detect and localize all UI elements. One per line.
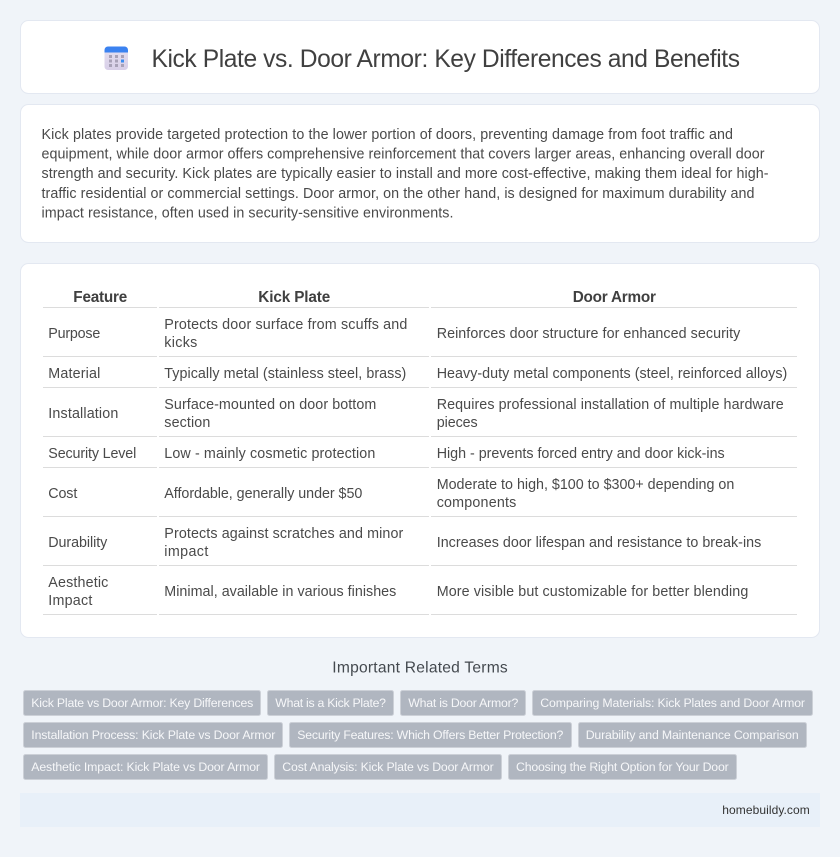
tag: installation process: Installation Process: Kick Plate vs Door Armor [31, 728, 275, 742]
panel: header [20, 20, 820, 94]
intro paragraph [42, 127, 769, 221]
tag: cost analysis: Cost Analysis: Kick Plate vs Door Armor [282, 760, 494, 774]
tag: choosing the right option [508, 754, 736, 780]
table header row [43, 289, 797, 308]
row: material: Material [48, 366, 100, 382]
tag: what is door armor: What is Door Armor? [408, 696, 518, 710]
panel: comparison table [20, 264, 820, 638]
row: security level: High - prevents forced entry and door kick-ins [437, 446, 725, 462]
row: installation: Surface-mounted on door bottom [164, 397, 376, 413]
footer source: homebuildy.com [722, 803, 810, 817]
row: aesthetic impact [43, 575, 797, 615]
row: purpose: Protects door surface from scuffs and [164, 317, 407, 333]
tag: security features [290, 722, 572, 748]
row: aesthetic impact: Minimal, available in various finishes [164, 584, 396, 600]
intro paragraph: strength and security. Kick plates are typically easier to install and more cost-effective, making them ideal for high- [42, 166, 769, 182]
table header row: Kick Plate [258, 289, 330, 306]
row: cost: Cost [48, 486, 77, 502]
tag: durability and maintenance [578, 722, 806, 748]
row: installation: section [164, 415, 210, 431]
row: installation: Requires professional installation of multiple hardware [437, 397, 784, 413]
tag: what is door armor [400, 690, 526, 716]
tag: aesthetic impact [24, 754, 268, 780]
intro paragraph: equipment, while door armor offers comprehensive reinforcement that covers larger areas, enhancing overall door [42, 147, 765, 163]
row: durability [43, 526, 797, 566]
intro paragraph: impact resistance, often used in security-sensitive environments. [42, 205, 454, 221]
tag: choosing the right option: Choosing the Right Option for Your Door [516, 760, 729, 774]
icon: calendar [104, 46, 128, 70]
row: installation [43, 397, 797, 437]
row: material [43, 366, 797, 388]
tag: aesthetic impact: Aesthetic Impact: Kick Plate vs Door Armor [31, 760, 260, 774]
row: cost [43, 477, 797, 517]
row: durability: Protects against scratches and minor [164, 526, 404, 542]
intro paragraph: Kick plates provide targeted protection to the lower portion of doors, preventing damage from foot traffic and [42, 127, 733, 143]
row: aesthetic impact: Aesthetic [48, 575, 108, 591]
row: material: Typically metal (stainless steel, brass) [164, 366, 406, 382]
row: purpose [43, 317, 797, 357]
row: purpose: Reinforces door structure for enhanced security [437, 326, 741, 342]
row: material: Heavy-duty metal components (steel, reinforced alloys) [437, 366, 787, 382]
row: security level: Security Level [48, 446, 136, 462]
tag: security features: Security Features: Which Offers Better Protection? [297, 728, 563, 742]
row: durability: Increases door lifespan and resistance to break-ins [437, 535, 761, 551]
tag: comparing materials: Comparing Materials: Kick Plates and Door Armor [540, 696, 805, 710]
title: Kick Plate vs. Door Armor: Key Differences and Benefits [152, 46, 740, 73]
panel: introduction [20, 104, 820, 242]
row: purpose: Purpose [48, 326, 100, 342]
row: aesthetic impact: More visible but customizable for better blending [437, 584, 748, 600]
tag: comparing materials [532, 690, 812, 716]
heading: related terms: Important Related Terms [332, 660, 508, 676]
intro paragraph: traffic residential or commercial settings. Door armor, on the other hand, is designed for maximum durability and [42, 186, 755, 202]
tag: what is a kick plate: What is a Kick Plate? [275, 696, 386, 710]
row: purpose: kicks [164, 335, 197, 351]
row: cost: Affordable, generally under $50 [164, 486, 362, 502]
row: cost: components [437, 495, 516, 511]
tag: cost analysis [274, 754, 502, 780]
tag: durability and maintenance: Durability and Maintenance Comparison [586, 728, 799, 742]
row: durability: impact [164, 544, 208, 560]
row: aesthetic impact: Impact [48, 593, 92, 609]
tag: installation process [24, 722, 282, 748]
table header row: Feature [73, 289, 127, 306]
footer [20, 793, 820, 827]
row: security level: Low - mainly cosmetic protection [164, 446, 375, 462]
row: installation: pieces [437, 415, 478, 431]
tag: key differences: Kick Plate vs Door Armor: Key Differences [31, 696, 253, 710]
row: durability: Durability [48, 535, 108, 551]
tag: key differences [24, 690, 260, 716]
row: cost: Moderate to high, $100 to $300+ depending on [437, 477, 734, 493]
tag: what is a kick plate [268, 690, 394, 716]
row: security level [43, 446, 797, 468]
table header row: Door Armor [573, 289, 656, 306]
related terms tags [24, 690, 812, 780]
row: installation: Installation [48, 406, 118, 422]
